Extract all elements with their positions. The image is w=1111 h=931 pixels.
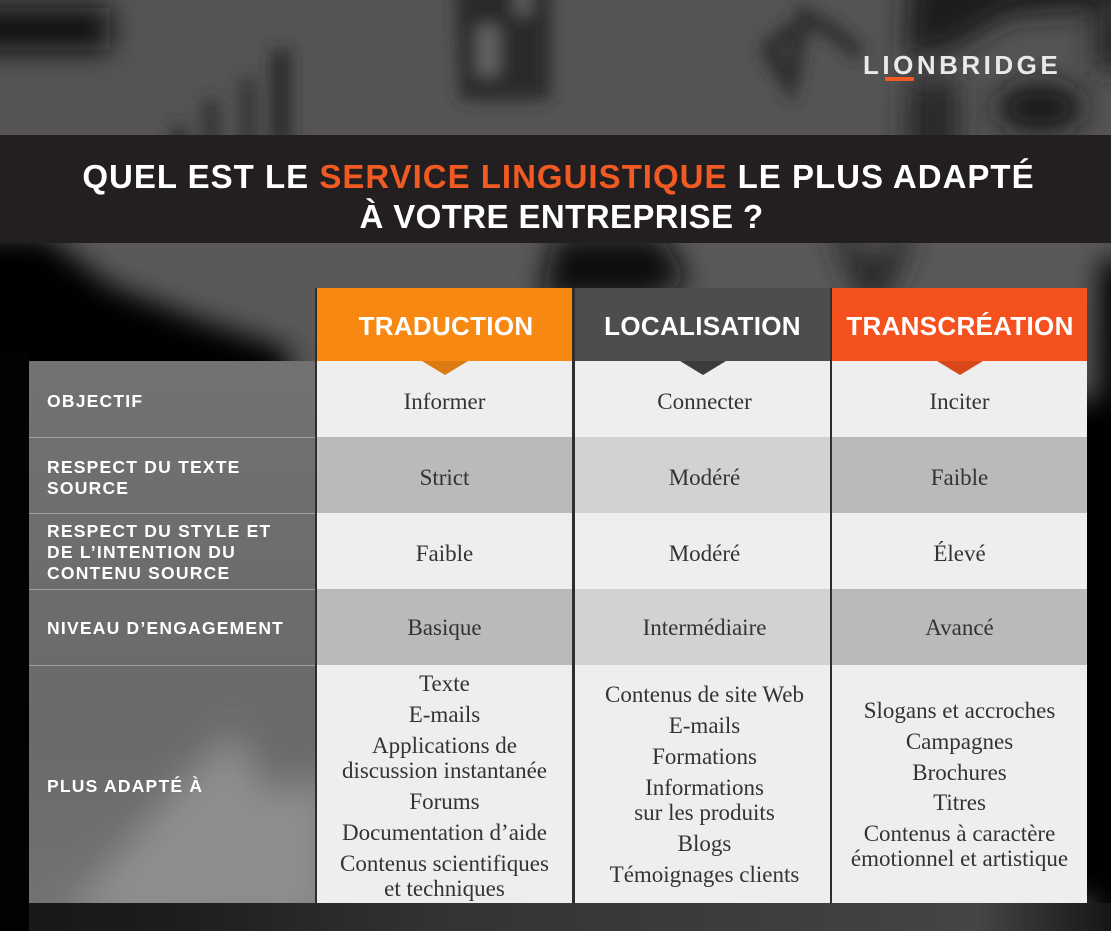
list: localisation usages: sur les produits [634, 800, 775, 825]
header: traduction [317, 288, 572, 361]
list: localisation usages: Formations [652, 744, 757, 769]
cell: traduction texte source [317, 437, 572, 513]
cell: localisation texte source: Modéré [669, 465, 740, 490]
list: traduction usages: Contenus scientifiques [340, 851, 549, 876]
list: traduction usages: Texte [419, 671, 470, 696]
criterion: plus adapté à: PLUS ADAPTÉ À [47, 776, 203, 796]
cell: traduction style: Faible [416, 541, 473, 566]
cell: transcréation engagement [832, 589, 1087, 665]
criterion: respect du style: RESPECT DU STYLE ET [47, 521, 271, 541]
cell: transcréation texte source: Faible [931, 465, 988, 490]
cell: localisation style [575, 513, 830, 589]
cell: transcréation style: Élevé [933, 541, 986, 566]
list: localisation usages: Témoignages clients [610, 862, 799, 887]
criterion: respect du texte source: SOURCE [47, 478, 129, 498]
list: traduction usages [317, 665, 572, 903]
criterion: respect du style: CONTENU SOURCE [47, 563, 230, 583]
list: transcréation usages: Contenus à caractère [864, 821, 1055, 846]
criterion: niveau d'engagement: NIVEAU D’ENGAGEMENT [47, 618, 284, 638]
title band [0, 135, 1111, 243]
header: transcréation [832, 288, 1087, 361]
list: traduction usages: Forums [409, 789, 480, 814]
title line 2: À VOTRE ENTREPRISE ? [359, 198, 764, 235]
list: transcréation usages [832, 665, 1087, 903]
panel: criteria column [29, 361, 315, 903]
cell: traduction style [317, 513, 572, 589]
pointer: localisation [680, 361, 726, 375]
list: transcréation usages: Brochures [912, 760, 1007, 785]
cells: traduction objectif [317, 361, 572, 437]
cell: localisation style: Modéré [669, 541, 740, 566]
cell: traduction texte source: Strict [420, 465, 469, 490]
criterion: respect du style [29, 514, 315, 590]
criterion: objectif: OBJECTIF [47, 391, 143, 411]
criterion: niveau d'engagement [29, 590, 315, 666]
list: transcréation usages: Campagnes [906, 729, 1013, 754]
list: localisation usages: Blogs [678, 831, 731, 856]
list: localisation usages: E-mails [669, 713, 740, 738]
criterion: respect du texte source: RESPECT DU TEXTE [47, 457, 241, 477]
criterion: objectif [29, 361, 315, 438]
criterion: respect du texte source [29, 438, 315, 514]
cells: transcréation objectif: Inciter [929, 389, 990, 414]
list: traduction usages: E-mails [409, 702, 480, 727]
cell: localisation texte source [575, 437, 830, 513]
list: localisation usages: Informations [645, 775, 764, 800]
pointer: traduction [422, 361, 468, 375]
cell: transcréation style [832, 513, 1087, 589]
header: localisation [575, 288, 830, 361]
cell: transcréation texte source [832, 437, 1087, 513]
list: traduction usages: et techniques [384, 876, 505, 901]
list: traduction usages: Applications de [372, 733, 517, 758]
title line 1: QUEL EST LE SERVICE LINGUISTIQUE LE PLUS ADAPTÉ [82, 158, 1035, 195]
logo: Lionbridge [863, 50, 1061, 81]
pointer: transcréation [937, 361, 983, 375]
list: localisation usages: Contenus de site Web [605, 682, 804, 707]
logo wordmark: LIONBRIDGE [863, 50, 1061, 80]
cells: transcréation objectif [832, 361, 1087, 437]
cells: traduction objectif: Informer [404, 389, 485, 414]
title [82, 158, 1035, 235]
cell: localisation engagement [575, 589, 830, 665]
cell: transcréation engagement: Avancé [925, 615, 994, 640]
cell: localisation engagement: Intermédiaire [643, 615, 766, 640]
cells: localisation objectif: Connecter [657, 389, 752, 414]
cell: traduction engagement: Basique [407, 615, 482, 640]
criterion: respect du style: DE L’INTENTION DU [47, 542, 236, 562]
logo underline [885, 77, 914, 81]
list: traduction usages: Documentation d’aide [342, 820, 547, 845]
header: localisation: LOCALISATION [604, 311, 801, 341]
list: traduction usages: discussion instantanée [342, 758, 547, 783]
list: transcréation usages: Slogans et accroches [864, 698, 1055, 723]
criteria texture [71, 732, 315, 903]
list: transcréation usages: Titres [933, 790, 986, 815]
list: localisation usages [575, 665, 830, 903]
cells: localisation objectif [575, 361, 830, 437]
header: traduction: TRADUCTION [359, 311, 533, 341]
header: transcréation: TRANSCRÉATION [846, 311, 1074, 341]
cell: traduction engagement [317, 589, 572, 665]
list: transcréation usages: émotionnel et artistique [851, 846, 1068, 871]
